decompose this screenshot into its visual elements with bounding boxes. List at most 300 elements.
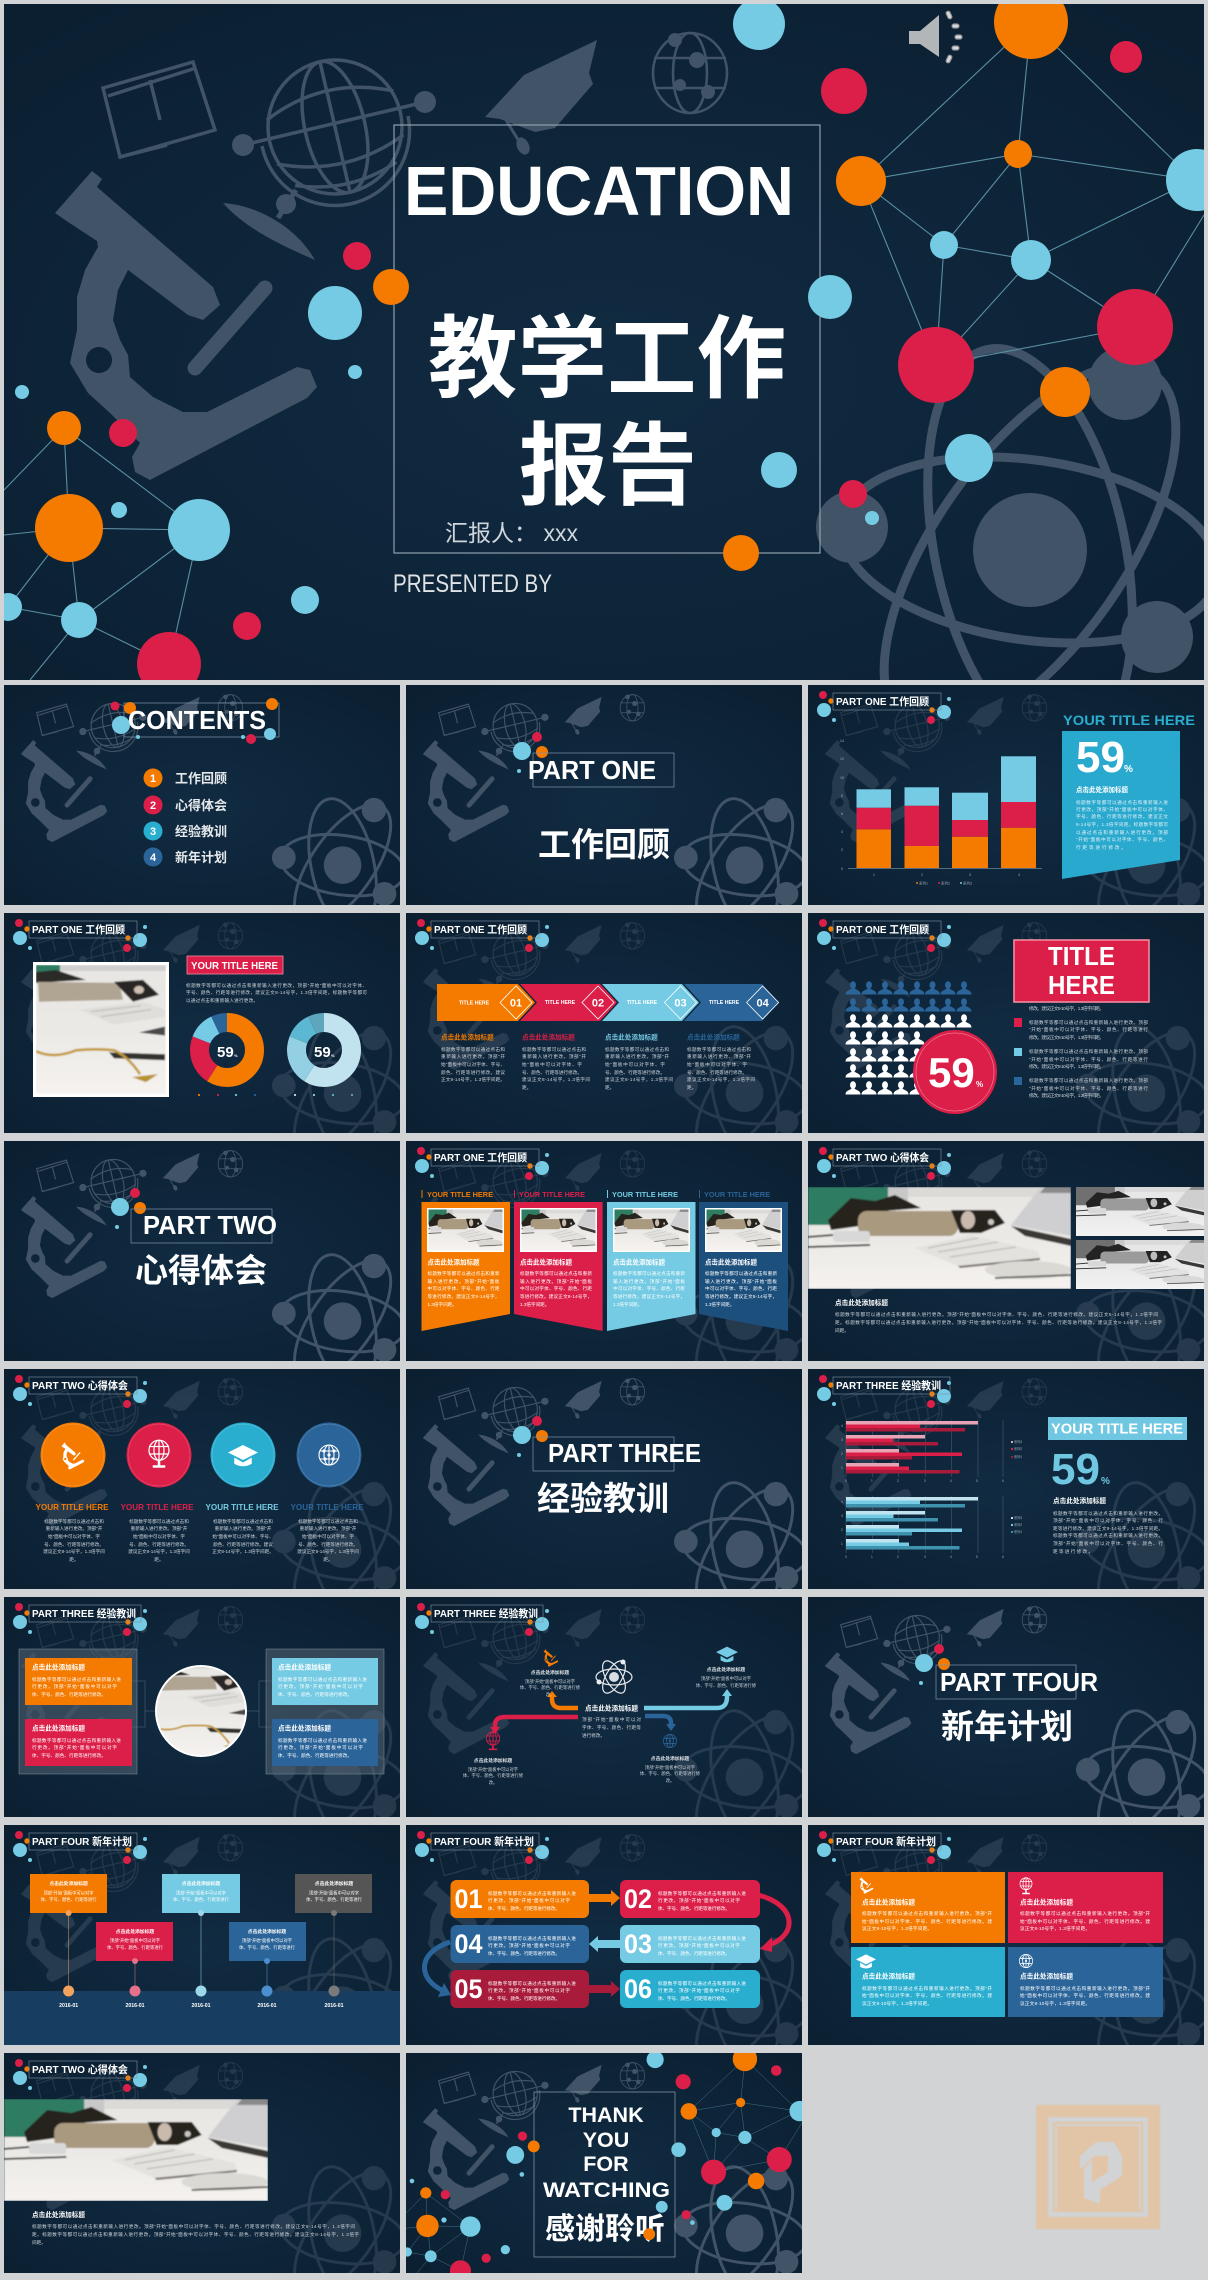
contents list: 1	[150, 773, 156, 785]
step 02: 体、字号、颜色、行距等进行修改。	[658, 1905, 730, 1912]
step 3 text: 始”面板中可以对字体、字	[605, 1061, 665, 1068]
thank you text: FOR	[583, 2152, 629, 2176]
bar chart: 3	[969, 873, 971, 877]
step 4 text: 距。	[687, 1085, 696, 1090]
step 3 text: 重新输入进行更改。顶部“开	[605, 1053, 669, 1060]
photo text: 标题数字等都可以通过点击和重新输入进行更改。顶部“开始”面板中可以对字体、字号、颜色、行距等进行修改。建议正文8-14号字，1.3倍字间	[32, 2223, 355, 2230]
red bar chart: 3	[841, 1438, 843, 1442]
legend text: “开始”面板中可以对字体、字号、颜色、行距等进行	[1029, 1026, 1148, 1033]
header chip: PART FOUR 新年计划	[836, 1835, 936, 1848]
red bar chart: 系列3	[1014, 1439, 1022, 1444]
column 4 text: 重新输入进行更改。顶部“开	[300, 1525, 357, 1532]
right panel: 体、字号、颜色、行距等进行修改。	[278, 1691, 352, 1698]
tile: graduation cap: 标题数字等都可以通过点击和重新输入进行更改。顶部“开	[862, 1985, 992, 1992]
legend text: 修改。建议正文8-10号字，1.3倍字间距。	[1029, 1092, 1104, 1099]
slide: thank you	[406, 2053, 802, 2273]
presented by: PRESENTED BY	[393, 570, 552, 598]
slide: single photo	[4, 2053, 400, 2273]
tile: microscope: 议正文8-10号字，1.3倍字间距。	[862, 1925, 932, 1932]
center text: 字体、字号、颜色、行距等	[582, 1724, 641, 1731]
red bar chart: 系列1	[1014, 1454, 1022, 1459]
step 04: 体、字号、颜色、行距等进行修改。	[488, 1950, 560, 1957]
blue bar chart	[841, 1496, 1022, 1559]
59% badge: 59	[928, 1049, 975, 1096]
contents list: 心得体会	[175, 798, 227, 813]
callout panel 59%: %	[1124, 764, 1133, 775]
bar chart: 1	[873, 873, 875, 877]
donut chart 1	[200, 1022, 254, 1078]
photo text: 距。标题数字等都可以通过点击和重新输入进行更改。顶部“开始”面板中可以对字体、字号、颜色、行距等进行修改。建议正文8-14号字，1.3倍字	[32, 2231, 359, 2238]
event 1: 体、字号、颜色、行距等进行	[41, 1896, 97, 1903]
step 4 text: 建议正文8-14号字，1.3倍字间	[687, 1076, 755, 1083]
card 2: 标题数字等都可以通过点击和重新	[520, 1270, 592, 1277]
thank you text: 感谢聆听	[545, 2213, 665, 2246]
header chip: PART FOUR 新年计划	[32, 1835, 132, 1848]
bar chart: 6	[841, 812, 843, 816]
presenter: 汇报人： xxx	[445, 520, 578, 546]
branch: blue globe: 点击此处添加标题	[651, 1755, 689, 1762]
donut values: 59	[314, 1044, 331, 1061]
blue bar chart: 3	[924, 1555, 926, 1559]
branch: red globe: 点击此处添加标题	[474, 1757, 512, 1764]
header chip	[817, 1831, 951, 1864]
branch: blue globe	[640, 1734, 701, 1784]
event 1: 点击此处添加标题	[49, 1880, 88, 1887]
bar chart: 系列1	[919, 880, 928, 886]
slide: four circles	[4, 1369, 400, 1589]
chevron band: TITLE HERE	[709, 1000, 740, 1006]
event 3: 2016-01	[191, 2003, 211, 2009]
center text: 进行修改。	[582, 1732, 605, 1739]
step 3 text: 距。	[605, 1085, 614, 1090]
column 4 text: 标题数字等都可以通过点击和	[298, 1518, 358, 1525]
branch: microscope: 点击此处添加标题	[531, 1669, 569, 1676]
section heading: PART THREE	[548, 1438, 701, 1468]
chevron band: TITLE HERE	[459, 1000, 490, 1006]
left panel: 标题数字等都可以通过点击和重新输入进	[32, 1676, 121, 1683]
branch: graduation cap	[696, 1647, 757, 1689]
branch: red globe	[463, 1732, 524, 1786]
tile: network globe	[1008, 1947, 1163, 2017]
title box	[1014, 940, 1149, 1002]
callout panel 59%: 8-14号字，1.3倍字间距。标题数字等都可	[1076, 821, 1168, 828]
red bar chart: 1	[841, 1466, 843, 1470]
branch: graduation cap: 体、字号、颜色、行距等进行修	[696, 1682, 757, 1689]
card 4: 等进行修改。建议正文8-14号字，	[705, 1293, 777, 1300]
column 2 text: YOUR TITLE HERE	[120, 1502, 194, 1512]
column 4 text: 号、颜色、行距等进行修改。	[298, 1541, 358, 1548]
left panel: 行更改。顶部“开始”面板中可以对字	[32, 1683, 117, 1690]
card 2: 点击此处添加标题	[520, 1258, 572, 1266]
header chip: PART TWO 心得体会	[32, 1379, 128, 1392]
step 2 text: 标题数字等都可以通过点击和	[522, 1046, 586, 1053]
step 03	[620, 1925, 760, 1963]
step 1 text: 点击此处添加标题	[441, 1032, 494, 1042]
card 1: 等进行修改。建议正文8-14号字，	[428, 1293, 500, 1300]
card 3: 点击此处添加标题	[613, 1258, 665, 1266]
step 06: 标题数字等都可以通过点击和重新输入进	[658, 1980, 746, 1987]
donut values: 59	[217, 1044, 234, 1061]
card 2: 1.3倍字间距。	[520, 1301, 549, 1308]
branch: blue globe: 体、字号、颜色、行距等进行修	[640, 1770, 701, 1777]
collage text: 标题数字等都可以通过点击和重新输入进行更改。顶部“开始”面板中可以对字体、字号、颜色、行距等进行修改。建议正文8-14号字，1.3倍字间	[835, 1311, 1158, 1318]
tile: graduation cap: 始”面板中可以对字体、字号、颜色、行距等进行修改。建	[862, 1992, 992, 1999]
blue bar chart: 2	[841, 1528, 843, 1532]
card 1: 中可以对字体、字号、颜色、行距	[428, 1285, 500, 1292]
left panel: 点击此处添加标题	[32, 1662, 85, 1672]
header chip	[415, 919, 549, 952]
tile: network globe: 标题数字等都可以通过点击和重新输入进行更改。顶部“开	[1020, 1985, 1150, 1992]
title: 报告: 报告	[519, 417, 697, 517]
red title: YOUR TITLE HERE	[191, 960, 278, 972]
event 2: 点击此处添加标题	[116, 1928, 154, 1935]
legend text: 修改。建议正文8-10号字，1.3倍字间距。	[1029, 1034, 1104, 1041]
circle: network globe	[296, 1422, 362, 1488]
step 4 text: 始”面板中可以对字体、字	[687, 1061, 747, 1068]
contents title	[110, 698, 279, 744]
header chip	[817, 691, 951, 724]
main photo	[808, 1187, 1071, 1289]
slide: part four	[808, 1597, 1204, 1817]
title box	[1048, 1417, 1187, 1440]
slide: part two	[4, 1141, 400, 1361]
photo	[33, 962, 169, 1097]
column 3 text: 颜色、行距等进行修改。建议	[213, 1541, 273, 1548]
tile: microscope: 点击此处添加标题	[862, 1898, 915, 1906]
bar chart: 系列3	[963, 880, 972, 886]
slide: part one	[406, 685, 802, 905]
bar chart: 12	[840, 757, 844, 761]
circle: globe	[126, 1422, 192, 1488]
column 4 text	[290, 1502, 364, 1562]
center text: 顶部“开始”面板中可以对	[582, 1716, 641, 1723]
red bar chart	[841, 1420, 1022, 1483]
step 2 text: 点击此处添加标题	[522, 1032, 575, 1042]
column 2 text: 建议正文8-14号字，1.3倍字间	[128, 1548, 190, 1555]
title: EDUCATION: EDUCATION	[404, 152, 794, 230]
legend text: “开始”面板中可以对字体、字号、颜色、行距等进行	[1029, 1056, 1148, 1063]
column 2 text	[120, 1502, 194, 1562]
section heading	[528, 753, 674, 863]
center text	[582, 1704, 641, 1739]
header chip: PART ONE 工作回顾	[836, 695, 929, 708]
tile: globe: 始”面板中可以对字体、字号、颜色、行距等进行修改。建	[1020, 1918, 1150, 1925]
header chip	[817, 1147, 951, 1180]
tile: network globe: 点击此处添加标题	[1020, 1972, 1073, 1980]
donut values	[217, 1044, 335, 1061]
slide: stacked bar chart	[808, 685, 1204, 905]
tile: microscope: 标题数字等都可以通过点击和重新输入进行更改。顶部“开	[862, 1910, 992, 1917]
step 1 text: 重新输入进行更改。顶部“开	[441, 1053, 505, 1060]
header chip	[13, 1603, 147, 1636]
chart description: 距等进行修改。	[1053, 1548, 1093, 1555]
callout panel 59%: 59	[1076, 733, 1125, 782]
column 3 text: 正文8-14号字，1.3倍字间距。	[212, 1548, 274, 1555]
step 03: 03	[624, 1929, 652, 1959]
card 4	[699, 1190, 788, 1331]
header chip	[13, 919, 147, 952]
event 3: 顶部“开始”面板中可以对字	[176, 1890, 226, 1896]
bar chart: 8	[841, 794, 843, 798]
chevron band: TITLE HERE	[627, 1000, 658, 1006]
tile: graduation cap: 点击此处添加标题	[862, 1972, 915, 1980]
legend text	[1014, 1005, 1148, 1099]
branch: microscope: 体、字号、颜色、行距等进行修	[520, 1684, 581, 1691]
step 2 text: 始”面板中可以对字体、字	[522, 1061, 582, 1068]
card 1: 输入进行更改。顶部“开始”面板	[428, 1278, 500, 1285]
card 3: 等进行修改。建议正文8-14号字，	[613, 1293, 685, 1300]
59% value: %	[1101, 1476, 1110, 1487]
paragraph: 标题数字等都可以通过点击和重新输入进行更改，顶部“开始”面板中可以对字体、	[186, 982, 367, 989]
section heading	[533, 1437, 701, 1517]
card 2: 输入进行更改。顶部“开始”面板	[520, 1278, 592, 1285]
legend text: 标题数字等都可以通过点击和重新输入进行更改。顶部	[1029, 1077, 1148, 1084]
blue bar chart: 4	[841, 1500, 843, 1504]
event 3: 点击此处添加标题	[182, 1880, 220, 1887]
branch: microscope	[520, 1649, 581, 1698]
header chip: PART THREE 经验教训	[32, 1607, 136, 1620]
chevron band: 04	[756, 998, 770, 1010]
column 1 text: 重新输入进行更改。顶部“开	[46, 1525, 103, 1532]
left panel: 标题数字等都可以通过点击和重新输入进	[32, 1737, 121, 1744]
legend text: “开始”面板中可以对字体、字号、颜色、行距等进行	[1029, 1085, 1148, 1092]
right panel: 行更改。顶部“开始”面板中可以对字	[278, 1683, 363, 1690]
title box: YOUR TITLE HERE	[1051, 1422, 1183, 1438]
photo text	[32, 2210, 359, 2246]
contents list	[144, 768, 227, 866]
event 3: 体、字号、颜色、行距等进行	[173, 1896, 230, 1903]
chart description: 点击此处添加标题	[1053, 1496, 1106, 1505]
red bar chart: 6	[1002, 1479, 1004, 1483]
event 1: 2016-01	[59, 2003, 78, 2009]
contents list: 经验教训	[175, 824, 227, 839]
step 05: 行更改。顶部“开始”面板中可以对字	[488, 1987, 570, 1994]
59% badge	[913, 1030, 997, 1114]
step 05: 05	[454, 1974, 482, 2004]
step 2 text: 号、颜色、行距等进行修改。	[522, 1069, 582, 1076]
header chip	[415, 1147, 549, 1180]
event 2	[96, 1922, 173, 2009]
photo text: 点击此处添加标题	[32, 2210, 85, 2219]
red bar chart: 4	[950, 1479, 952, 1483]
thank you text	[543, 2103, 670, 2246]
column 3 text	[206, 1502, 279, 1555]
red bar chart: 2	[897, 1479, 899, 1483]
card 3	[607, 1190, 696, 1331]
step 04: 04	[454, 1929, 482, 1959]
circle: microscope	[40, 1422, 106, 1488]
card 3: 1.3倍字间距。	[613, 1301, 642, 1308]
callout panel 59%: “开始”面板中可以对字体、字号、颜色、	[1076, 836, 1168, 843]
right panel: 体、字号、颜色、行距等进行修改。	[278, 1752, 352, 1759]
event 3	[162, 1874, 240, 2009]
tile: microscope	[851, 1872, 1005, 1943]
right panel: 点击此处添加标题	[278, 1724, 331, 1732]
thank you frame	[534, 2092, 675, 2257]
contents list: 工作回顾	[175, 771, 227, 786]
bar chart: 14	[840, 739, 844, 743]
event 5: 顶部“开始”面板中可以对字	[309, 1890, 359, 1896]
column 4 text: YOUR TITLE HERE	[290, 1502, 364, 1512]
tile: graduation cap	[851, 1947, 1005, 2017]
blue bar chart: 1	[841, 1542, 843, 1546]
branch: microscope: 顶部“开始”面板中可以对字	[525, 1678, 575, 1685]
card 3: 标题数字等都可以通过点击和重新	[613, 1270, 685, 1277]
cover slide: EDUCATION 教学工作报告	[4, 4, 1204, 680]
step 05: 体、字号、颜色、行距等进行修改。	[488, 1995, 560, 2002]
tile: globe: 标题数字等都可以通过点击和重新输入进行更改。顶部“开	[1020, 1910, 1150, 1917]
header chip: PART TWO 心得体会	[32, 2063, 128, 2076]
donut values: %	[331, 1053, 335, 1058]
connector arrows	[424, 1890, 789, 1997]
blue bar chart: 2	[897, 1555, 899, 1559]
bar chart	[840, 739, 1042, 886]
chevron band: 02	[592, 998, 604, 1010]
header chip	[13, 1375, 147, 1408]
step 1 text: 颜色、行距等进行修改。建议	[441, 1069, 505, 1076]
branch: blue globe: 改。	[666, 1777, 674, 1784]
step 03: 体、字号、颜色、行距等进行修改。	[658, 1950, 730, 1957]
column 1 text: 建议正文8-14号字，1.3倍字间	[43, 1548, 105, 1555]
contents list: 新年计划	[175, 850, 227, 865]
header chip	[13, 1831, 147, 1864]
card 4: 点击此处添加标题	[705, 1258, 757, 1266]
step 1 text: 标题数字等都可以通过点击和	[441, 1046, 505, 1053]
step 4 text	[687, 1032, 755, 1090]
slide: four tiles	[808, 1825, 1204, 2045]
card 4: 标题数字等都可以通过点击和重新	[705, 1270, 777, 1277]
column 2 text: 重新输入进行更改。顶部“开	[131, 1525, 188, 1532]
bar chart: 0	[841, 867, 843, 871]
header chip: PART THREE 经验教训	[836, 1379, 941, 1392]
watermark logo	[1036, 2104, 1160, 2230]
column 3 text: 始”面板中可以对字体、字号、	[212, 1533, 274, 1540]
column 1 text	[36, 1502, 109, 1562]
card 4: 输入进行更改。顶部“开始”面板	[705, 1278, 777, 1285]
event 4	[229, 1922, 306, 2009]
step 02: 标题数字等都可以通过点击和重新输入进	[658, 1890, 746, 1897]
contents list: 3	[150, 826, 156, 838]
event 5: 体、字号、颜色、行距等进行	[306, 1896, 363, 1903]
side photos	[1076, 1187, 1204, 1289]
card 3: 中可以对字体、字号、颜色、行距	[613, 1285, 685, 1292]
column 2 text: 距。	[154, 1557, 164, 1562]
paragraph: 字号、颜色、行距等进行修改，建议正文8-14号字，1.3倍字间距。标题数字等都可	[186, 989, 367, 996]
event 2: 体、字号、颜色、行距等进行	[107, 1944, 164, 1951]
card 3: 输入进行更改。顶部“开始”面板	[613, 1278, 685, 1285]
chart description: 距等进行修改。建议正文8-14号字，1.3倍字间距。	[1053, 1525, 1163, 1532]
card 1: YOUR TITLE HERE	[427, 1190, 493, 1199]
thank you text: YOU	[583, 2128, 629, 2152]
red bar chart: 0	[845, 1479, 847, 1483]
pictogram	[846, 981, 972, 1094]
header chip: PART TWO 心得体会	[836, 1151, 929, 1164]
header chip: PART ONE 工作回顾	[836, 923, 929, 936]
step 06: 体、字号、颜色、行距等进行修改。	[658, 1995, 730, 2002]
contents list: 2	[150, 800, 156, 812]
slide: boxes around photo circle	[4, 1597, 400, 1817]
branch: graduation cap: 顶部“开始”面板中可以对字	[701, 1675, 751, 1682]
timeline band	[4, 1991, 400, 2045]
blue bar chart: 1	[871, 1555, 873, 1559]
step 01	[450, 1880, 589, 1918]
blue bar chart: 3	[841, 1514, 843, 1518]
blue bar chart: 0	[845, 1555, 847, 1559]
collage text: 间距。	[835, 1327, 849, 1334]
step 05: 标题数字等都可以通过点击和重新输入进	[488, 1980, 576, 1987]
left panel: 点击此处添加标题	[32, 1724, 85, 1732]
card 4: 1.3倍字间距。	[705, 1301, 734, 1308]
red bar chart: 系列2	[1014, 1446, 1022, 1451]
icon: speaker	[909, 11, 962, 63]
tile: network globe: 始”面板中可以对字体、字号、颜色、行距等进行修改。建	[1020, 1992, 1150, 1999]
column 1 text: 号、颜色、行距等进行修改。	[44, 1541, 104, 1548]
59% badge: %	[976, 1080, 983, 1089]
chevron band	[437, 984, 779, 1021]
step 01: 行更改。顶部“开始”面板中可以对字	[488, 1897, 570, 1904]
section heading: 新年计划	[941, 1708, 1073, 1745]
card 2: 中可以对字体、字号、颜色、行距	[520, 1285, 592, 1292]
callout panel 59%: 点击此处添加标题	[1076, 785, 1128, 794]
column 1 text: 标题数字等都可以通过点击和	[44, 1518, 104, 1525]
column 1 text: YOUR TITLE HERE	[36, 1502, 109, 1512]
slide: timeline	[4, 1825, 400, 2045]
callout panel 59%: 行更改。顶部“开始”面板中可以对字体、	[1076, 806, 1168, 813]
card 3: YOUR TITLE HERE	[612, 1190, 678, 1199]
callout panel 59%: 字号、颜色、行距等进行修改。建议正文	[1076, 813, 1168, 820]
slide: six steps	[406, 1825, 802, 2045]
blue bar chart: 6	[1002, 1555, 1004, 1559]
header chip: PART ONE 工作回顾	[434, 923, 527, 936]
header chip	[415, 1831, 549, 1864]
red bar chart: 1	[871, 1479, 873, 1483]
center text: 点击此处添加标题	[585, 1704, 638, 1712]
header chip	[415, 1603, 549, 1636]
left panel: 体、字号、颜色、行距等进行修改。	[32, 1691, 106, 1698]
icon: atom	[596, 1657, 632, 1697]
title box: TITLE	[1048, 941, 1115, 971]
step 1 text	[441, 1032, 505, 1083]
column 1 text: 始”面板中可以对字体、字	[48, 1533, 100, 1540]
column 4 text: 距。	[323, 1557, 333, 1562]
tile: globe: 点击此处添加标题	[1020, 1898, 1073, 1906]
column 2 text: 号、颜色、行距等进行修改。	[129, 1541, 189, 1548]
blue bar chart: 系列1	[1014, 1529, 1022, 1534]
column 3 text: 重新输入进行更改。顶部“开	[215, 1525, 272, 1532]
step 4 text: 号、颜色、行距等进行修改。	[687, 1069, 747, 1076]
bar chart: 4	[1018, 873, 1020, 877]
collage text	[835, 1298, 1162, 1334]
section heading: 心得体会	[135, 1252, 267, 1289]
chevron band: 03	[674, 998, 687, 1010]
step 02: 行更改。顶部“开始”面板中可以对字	[658, 1897, 740, 1904]
step 01: 体、字号、颜色、行距等进行修改。	[488, 1905, 560, 1912]
branch: red globe: 改。	[489, 1779, 497, 1786]
event 4: 体、字号、颜色、行距等进行	[239, 1944, 296, 1951]
section heading: 经验教训	[537, 1480, 669, 1517]
donut legend dots	[198, 1094, 353, 1096]
section heading	[936, 1665, 1098, 1745]
contents list: 4	[150, 852, 157, 864]
step 3 text: 建议正文8-14号字，1.3倍字间	[605, 1076, 673, 1083]
step 06	[620, 1970, 760, 2008]
event 5: 点击此处添加标题	[315, 1880, 353, 1887]
branch: blue globe: 顶部“开始”面板中可以对字	[645, 1764, 695, 1771]
step 2 text: 建议正文8-14号字，1.3倍字间	[522, 1076, 590, 1083]
header chip: PART THREE 经验教训	[434, 1607, 538, 1620]
column 3 text: 标题数字等都可以通过点击和	[213, 1518, 273, 1525]
header chip: PART ONE 工作回顾	[434, 1151, 527, 1164]
